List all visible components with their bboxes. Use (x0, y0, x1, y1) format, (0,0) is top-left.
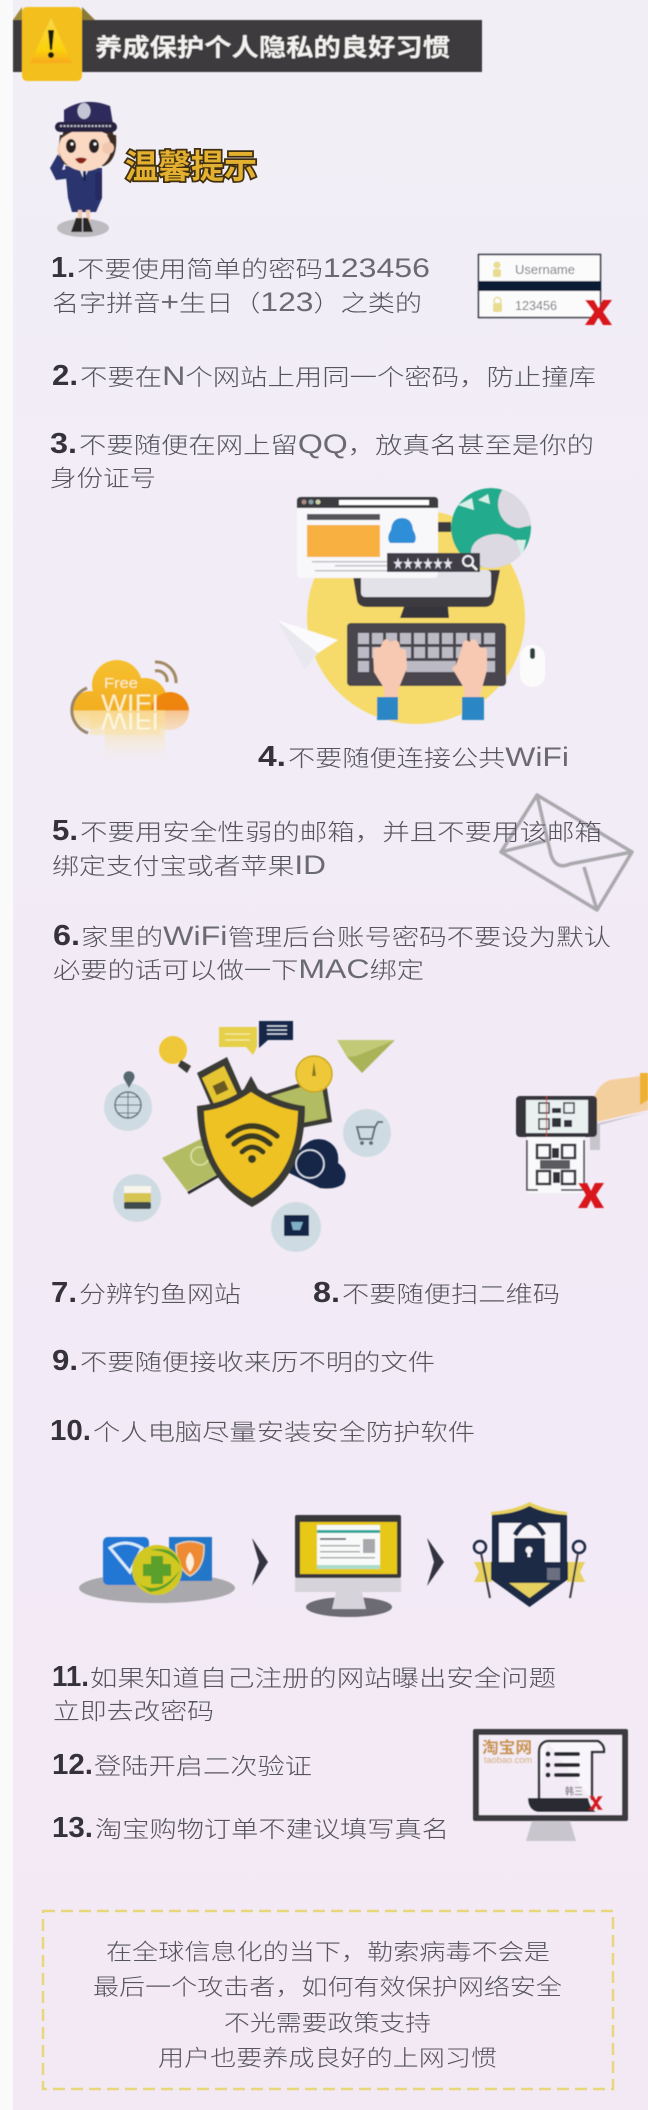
tip 11 (52, 1661, 556, 1724)
tip 11: 如果知道自己注册的网站曝出安全问题 (90, 1665, 556, 1691)
title text: 养成保护个人隐私的良好习惯 (95, 34, 450, 62)
icon: globe (450, 487, 532, 569)
icon: QQ penguin (388, 518, 416, 543)
icon: login form with red cross: Username (515, 262, 575, 277)
tip 7: 分辨钓鱼网站 (79, 1281, 241, 1307)
tip 6 (53, 920, 611, 984)
tip 10: 个人电脑尽量安装安全防护软件 (93, 1419, 475, 1445)
tip 9 (52, 1345, 435, 1377)
icon: monitor (295, 1515, 401, 1617)
arrow: chevron two (427, 1538, 444, 1586)
illustration: wifi security shield cluster (104, 1021, 395, 1252)
police officer mascot (50, 102, 117, 237)
icon: phone (197, 1057, 245, 1108)
keyboard (347, 623, 506, 686)
icon: cart circle (343, 1109, 391, 1157)
tip 3: 3. (50, 428, 77, 460)
tip 1: 名字拼音 +生日（ 123 ）之类的 (52, 287, 422, 317)
icon: dark cloud (283, 1139, 346, 1188)
tip 11: 立即去改密码 (53, 1698, 214, 1724)
icon: warning badge (13, 7, 95, 81)
icon: light bulb (159, 1036, 191, 1073)
tip 1: 不要使用简单的密码 123456 (77, 253, 430, 283)
icon: padlock shield with keys (474, 1502, 585, 1607)
icon: antivirus apps (79, 1537, 235, 1603)
tip 10: 10. (50, 1415, 91, 1447)
closing text (93, 1940, 562, 2071)
search box with masked password (387, 553, 480, 572)
icon: paper plane (277, 620, 338, 670)
heading: warm reminder: 温馨提示 (125, 148, 257, 185)
icon: envelope outline (501, 795, 632, 910)
tip 5: 5. (52, 815, 78, 847)
tip 7 (51, 1277, 241, 1309)
icon: olive paper plane (337, 1040, 395, 1073)
tip 9: 不要随便接收来历不明的文件 (80, 1349, 435, 1375)
icon: free wifi cloud: WIFI (101, 690, 159, 717)
tip 10 (50, 1415, 475, 1447)
tip 5 (52, 815, 602, 880)
tip 2: 2. (52, 360, 78, 392)
icon: free wifi cloud (71, 660, 189, 760)
icon: server stack circle (113, 1174, 161, 1222)
tip 1 (51, 252, 430, 317)
icon: free wifi cloud: Free (104, 675, 138, 692)
tip 8: 不要随便扫二维码 (342, 1281, 560, 1307)
tip 4: 4. (258, 741, 286, 773)
icon: login form with red cross: 123456 (515, 298, 557, 313)
tip 13 (52, 1812, 449, 1844)
green card right (263, 1075, 332, 1130)
dashed frame (43, 1911, 613, 2089)
icon: taobao order on monitor: 淘宝网 (482, 1738, 532, 1757)
icon: shop window circle (271, 1202, 321, 1252)
tip 12: 登陆开启二次验证 (94, 1753, 312, 1779)
tip 12 (52, 1749, 312, 1781)
tip 6: 6. (53, 920, 80, 952)
closing text: 最后一个攻击者，如何有效保护网络安全 (93, 1975, 562, 2000)
tip 3: 身份证号 (50, 465, 156, 491)
closing text: 用户也要养成良好的上网习惯 (158, 2046, 497, 2071)
icon: chat bubbles (219, 1021, 293, 1055)
tip 9: 9. (52, 1345, 78, 1377)
icon: scanning QR code with phone (516, 1073, 648, 1208)
tip 5: 绑定支付宝或者苹果 ID (52, 850, 326, 880)
tip 1: 1. (51, 252, 75, 284)
icon: login form with red cross (478, 254, 612, 325)
illustration: computer with browser and globe: ★★★★★★ (393, 556, 453, 571)
icon: taobao order on monitor: taobao.com (484, 1755, 532, 1765)
tip 3: 不要随便在网上留 QQ ，放真名甚至是你的 (79, 429, 594, 459)
process row: antivirus to computer to lock (79, 1502, 585, 1617)
tip 12: 12. (52, 1749, 93, 1781)
tip 8: 8. (313, 1277, 340, 1309)
tip 13: 淘宝购物订单不建议填写真名 (95, 1816, 449, 1842)
tip 3 (50, 428, 594, 491)
closing text: 在全球信息化的当下，勒索病毒不会是 (106, 1940, 550, 1965)
green card left (162, 1133, 225, 1193)
icon: taobao order on monitor (473, 1729, 628, 1841)
tip 11: 11. (52, 1661, 89, 1693)
tip 2: 不要在 N个网站上用同一个密码，防止撞库 (80, 361, 596, 391)
title banner (13, 7, 482, 81)
tip 7: 7. (51, 1277, 77, 1309)
hands (373, 639, 407, 697)
closing text: 不光需要政策支持 (224, 2011, 431, 2036)
tip 6: 家里的 WiFi 管理后台账号密码不要设为默认 (81, 921, 611, 951)
illustration: computer with browser and globe (277, 480, 545, 724)
callout: closing message (43, 1911, 613, 2089)
tip 6: 必要的话可以做一下 MAC 绑定 (53, 954, 424, 984)
title bar (13, 20, 482, 72)
tip 13: 13. (52, 1812, 93, 1844)
icon: free wifi cloud: WIFI (101, 707, 159, 734)
arrow: chevron one (252, 1538, 268, 1586)
left margin strip (0, 0, 13, 2110)
icon: taobao order on monitor: 韩三 (565, 1785, 583, 1798)
icon: mouse (520, 645, 545, 687)
tip 4: 不要随便连接公共 WiFi (288, 742, 569, 772)
icon: globe circle (104, 1071, 152, 1131)
tip 8 (313, 1277, 560, 1309)
icon: shield with wifi (197, 1076, 305, 1207)
icon: clock (296, 1056, 332, 1092)
tip 5: 不要用安全性弱的邮箱，并且不要用该邮箱 (80, 819, 602, 845)
